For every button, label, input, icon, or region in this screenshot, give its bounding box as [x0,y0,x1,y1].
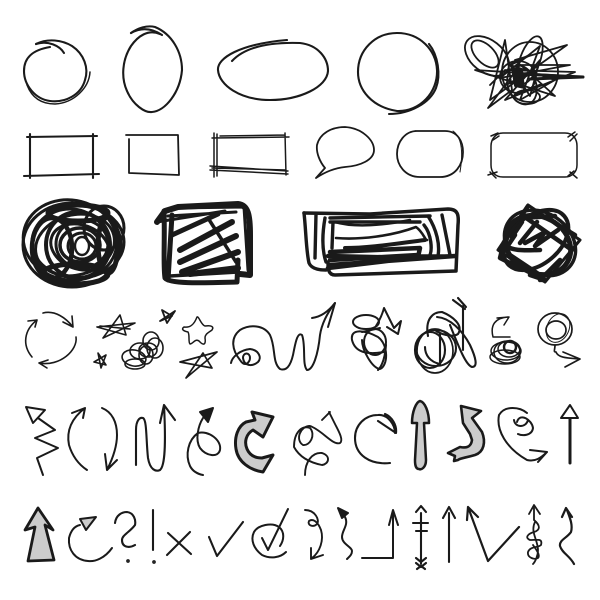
double circle [24,40,90,104]
big circle [358,33,438,114]
circled check [252,509,288,557]
wiggle arrow with loop [231,303,335,370]
V-shaped arrow [467,507,519,561]
small star top [160,310,175,323]
rounded rectangle with corner ticks [488,132,577,178]
tangled scribble [457,28,583,109]
star with stroke [180,352,217,378]
scribble arrow D [538,310,580,367]
oval with overlap [123,26,182,112]
check mark [209,522,243,556]
small looped scribble [121,332,163,369]
wide rectangular scribble [304,209,458,275]
plain rectangle [126,135,179,175]
wavy up arrow [560,508,574,564]
star [97,315,135,338]
spiral arrow [498,408,547,462]
round black scribble [17,192,124,288]
thin up arrow [443,507,455,562]
N-shaped arrow [136,405,175,471]
feathered arrow [413,506,428,569]
cross-corner rectangle [24,134,99,178]
horizontal ellipse [218,40,328,100]
L-shaped arrow [362,510,398,558]
blob star [183,317,213,344]
sketchy double rectangle [210,133,289,177]
speech bubble [316,127,374,178]
grey hook arrow [448,406,484,461]
curved arrow up [68,408,87,470]
grey upward arrow [412,401,429,469]
question mark [115,512,135,562]
wavy arrow solid head [338,508,352,559]
twisted loop arrow [294,412,341,475]
C arrow [355,414,396,463]
cross mark [167,532,191,555]
curved arrow down [102,408,117,470]
zigzag arrow [26,407,58,475]
circular arrows [26,312,76,368]
grey C arrow [235,412,273,472]
circular arrow with grey head [69,517,112,561]
diamond scribble [492,197,588,289]
rounded rectangle [397,131,463,177]
simple up arrow [561,405,578,463]
scribble arrow A [352,308,401,370]
square black scribble [157,204,250,283]
loop arrow down [305,510,323,559]
squiggle arrow [527,505,541,564]
grey bold up arrow [25,508,54,561]
scribble arrow B [415,298,476,373]
exclamation mark [153,510,155,563]
looped arrow with solid head [188,408,220,475]
small star bottom [94,353,106,368]
scribble arrow C [490,317,521,364]
